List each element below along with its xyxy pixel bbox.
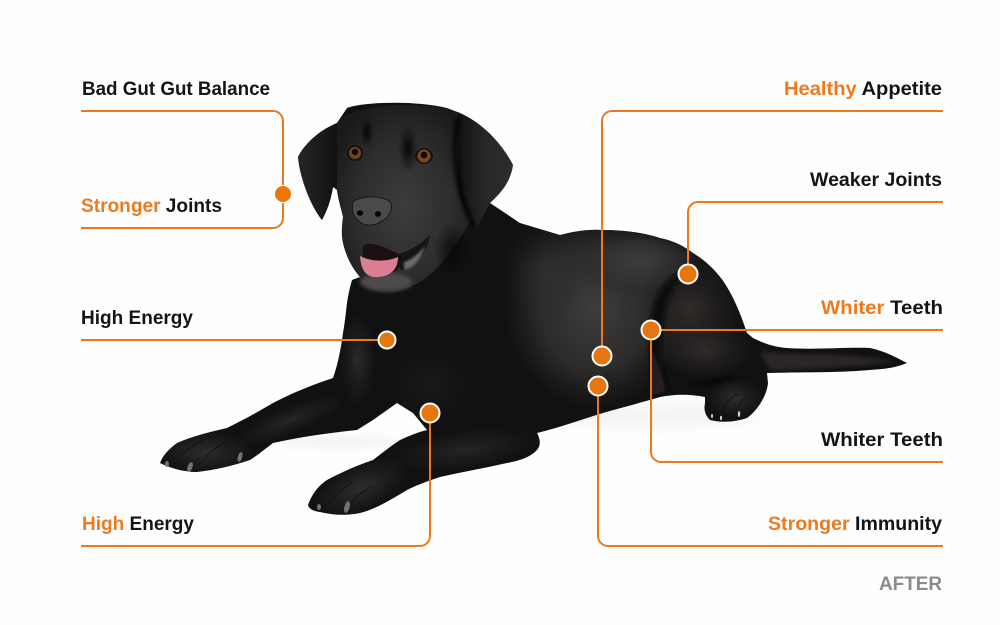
floor shadow under dog: [280, 406, 760, 448]
front legs shading: [172, 434, 238, 470]
callout: Bad Gut Gut Balance: Bad Gut Gut Balance: [82, 78, 270, 100]
callout: Whiter Teeth, lower: [651, 340, 943, 462]
callout: Stronger Immunity: [588, 376, 943, 546]
callout: Stronger Joints with bracket line: [81, 111, 292, 228]
callout: Weaker Joints: Weaker Joints: [810, 169, 942, 191]
ears: [298, 123, 337, 220]
callout: Whiter Teeth, lower: Whiter Teeth: [821, 429, 943, 451]
dog toes and claws: [165, 394, 750, 513]
dog eyes: [347, 145, 433, 164]
callout: High Energy, upper left: High Energy: [81, 307, 193, 329]
head: [337, 105, 471, 293]
callout: Whiter Teeth, upper: [642, 297, 943, 340]
callout: Healthy Appetite: [592, 78, 943, 366]
callout: Healthy Appetite: Healthy Appetite: [784, 78, 942, 100]
callout: High Energy, lower left: High Energy: [82, 513, 194, 535]
illustration: black labrador lying down: [157, 103, 907, 532]
tail: [760, 352, 895, 370]
callout: Weaker Joints: [678, 169, 943, 284]
fur shading on body: [157, 105, 895, 532]
dog mouth and tongue: [360, 235, 430, 291]
callout: High Energy, upper left: [81, 307, 396, 348]
callout: Stronger Immunity: Stronger Immunity: [768, 513, 942, 535]
callout: Whiter Teeth, upper: Whiter Teeth: [821, 297, 943, 319]
callout: Stronger Joints with bracket line: Stronger Joints: [81, 195, 222, 217]
label: AFTER: AFTER: [879, 573, 942, 595]
callout: High Energy, lower left: [81, 404, 440, 546]
dog nose: [352, 197, 391, 225]
